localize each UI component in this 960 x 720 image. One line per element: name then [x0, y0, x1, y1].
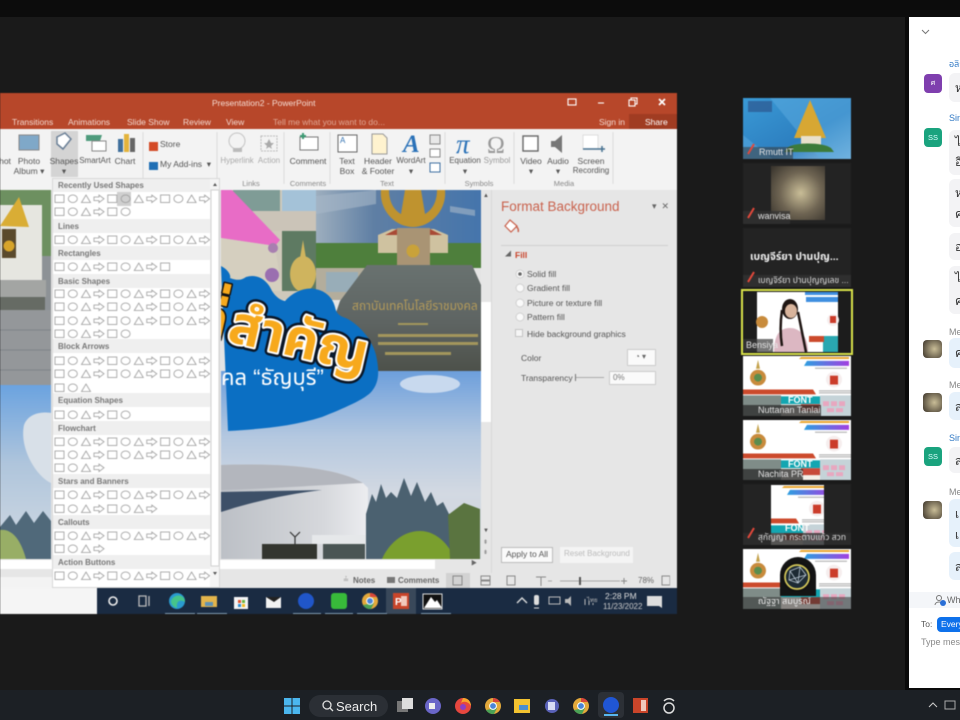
format background pane: Color — [521, 353, 541, 363]
ribbon: Symbols — [465, 179, 493, 188]
status bar: Notes — [353, 576, 375, 585]
chat panel — [905, 17, 960, 690]
icon: ribbon icons: A — [401, 131, 420, 158]
ribbon: Photo — [18, 156, 40, 166]
PowerPoint title bar: Animations — [68, 117, 110, 127]
participant thumbnails column — [740, 97, 854, 610]
slide horizontal scrollbar: ▶ — [471, 561, 477, 567]
participant thumbnails column: Bensiya — [746, 340, 778, 350]
ribbon: ▾ — [409, 166, 413, 176]
participant thumbnails column: wanvisa — [758, 211, 791, 221]
left temple photo — [0, 190, 51, 385]
participant thumbnails column: FONT — [788, 459, 812, 469]
participant thumbnails column: เบญจิร์ยา ปานปุญญเลข ... — [758, 275, 849, 285]
chat contents — [909, 59, 960, 647]
PowerPoint title bar: Share — [645, 117, 668, 127]
ribbon: Box — [340, 166, 354, 176]
ribbon: Action — [258, 156, 280, 165]
icon: ribbon icons: A — [340, 136, 346, 145]
menu scrollbar — [210, 178, 220, 588]
format background pane: Pattern fill — [527, 312, 565, 322]
crown monument photo: สถาบันเทคโนโลยีราชมงคล — [352, 299, 478, 313]
ribbon: Comment — [290, 156, 326, 166]
ribbon: ▾ — [62, 166, 66, 176]
status bar — [0, 573, 677, 588]
format background pane: ◔ ▾ — [635, 352, 646, 361]
blue blob with headline — [220, 266, 379, 432]
ribbon: Hyperlink — [220, 156, 254, 165]
blue blob with headline: สำคัญ — [223, 294, 375, 384]
format background pane: Apply to All — [506, 549, 548, 559]
format background pane: Hide background graphics — [527, 329, 626, 339]
taskbar icons — [109, 593, 662, 614]
ribbon: Screen — [578, 156, 604, 166]
ribbon: Album ▾ — [14, 166, 44, 176]
chat contents: SS — [928, 452, 938, 461]
PowerPoint title bar: Slide Show — [127, 117, 170, 127]
ribbon: Chart — [115, 156, 135, 166]
ribbon: Equation — [449, 156, 481, 165]
ribbon: Links — [242, 179, 260, 188]
participant tile: Rmutt IT — [743, 98, 851, 159]
section header bands — [52, 178, 210, 569]
format background pane: Picture or texture fill — [527, 298, 602, 308]
shapes dropdown menu: Lines — [58, 222, 79, 231]
slide vertical scrollbar: ▼ — [483, 528, 489, 534]
chat contents: เ — [955, 528, 959, 542]
ribbon: WordArt — [396, 156, 426, 165]
shapes dropdown menu — [52, 178, 220, 588]
format background pane — [491, 190, 677, 573]
ribbon: Text — [380, 179, 394, 188]
slide canvas background — [0, 190, 491, 573]
ribbon: SmartArt — [79, 156, 111, 165]
icon: paint bucket — [504, 218, 520, 234]
PowerPoint title bar: Sign in — [599, 117, 625, 127]
participant thumbnails column: Nuttanan Tanlai — [758, 405, 820, 415]
status bar: ≟ — [343, 577, 349, 584]
format background pane: Transparency — [521, 373, 573, 383]
PowerPoint window — [0, 92, 678, 615]
ribbon: Header — [364, 156, 392, 166]
shape icon rows — [53, 192, 211, 583]
ribbon: Comments — [290, 179, 326, 188]
crown monument photo — [316, 190, 481, 371]
participant thumbnails column: FONT — [788, 395, 812, 405]
ribbon — [0, 129, 677, 190]
slide vertical scrollbar: ⇟ — [483, 550, 488, 556]
ribbon: My Add-ins ▾ — [160, 159, 211, 169]
shapes dropdown menu: Equation Shapes — [58, 396, 123, 405]
slide vertical scrollbar: ⇞ — [483, 540, 488, 546]
windows 10 taskbar: ไทย — [587, 598, 598, 604]
PowerPoint title bar: Tell me what you want to do... — [273, 117, 385, 127]
participant tile: Nuttanan — [743, 356, 851, 416]
format background pane: Reset Background — [564, 549, 630, 558]
ribbon: Store — [160, 139, 180, 149]
participant tile: wanvisa — [743, 163, 851, 224]
windows 10 taskbar: 11/23/2022 — [603, 602, 642, 611]
format background pane: Gradient fill — [527, 283, 570, 293]
PowerPoint title bar: Presentation2 - PowerPoint — [212, 98, 315, 108]
slide horizontal scrollbar — [0, 559, 491, 573]
icon: ribbon icons: Ω — [487, 133, 505, 159]
PowerPoint title bar: Transitions — [12, 117, 53, 127]
participant thumbnails column: Nachita PR — [758, 469, 804, 479]
status bar: Comments — [398, 576, 439, 585]
PowerPoint title bar — [0, 93, 677, 129]
slide vertical scrollbar — [481, 190, 491, 573]
shapes dropdown menu: Recently Used Shapes — [58, 181, 144, 190]
ribbon: Symbol — [484, 156, 510, 165]
muted mic markers — [746, 143, 756, 539]
participant thumbnails column: เบญจีร์ยา ปานปุญ... — [750, 251, 839, 263]
chat contents: เ — [955, 507, 959, 521]
ribbon: Audio — [547, 156, 569, 166]
slide vertical scrollbar: ▲ — [483, 193, 489, 199]
windows 11 taskbar — [0, 690, 960, 720]
format background pane: ◢ — [505, 252, 511, 258]
PowerPoint title bar: Review — [183, 117, 211, 127]
windows 10 taskbar — [97, 588, 677, 614]
taskbar icons: P — [395, 597, 402, 608]
left sky and trees — [0, 385, 51, 559]
participant thumbnails column: Rmutt IT — [759, 147, 794, 157]
shapes dropdown menu: Flowchart — [58, 424, 96, 433]
ribbon: ▾ — [556, 166, 560, 176]
status bar: 78% — [638, 576, 654, 585]
ribbon: ▾ — [529, 166, 533, 176]
windows 11 taskbar: Search — [336, 699, 377, 714]
icon: ribbon icons — [19, 129, 605, 172]
format background pane: Format Background — [501, 199, 620, 214]
shapes dropdown menu: Stars and Banners — [58, 477, 129, 486]
participant tile: Bensiya active speaker — [742, 290, 852, 354]
sky and building photo — [221, 371, 481, 559]
participant thumbnails column: ณัฐฐา สมบูรณ์ — [758, 596, 811, 606]
ribbon: Media — [554, 179, 574, 188]
shapes dropdown menu: Basic Shapes — [58, 277, 110, 286]
ribbon: ▾ — [463, 166, 467, 176]
ribbon: Shapes — [50, 156, 78, 166]
shapes dropdown menu: Action Buttons — [58, 558, 115, 567]
blue blob with headline: สำคัญ — [223, 294, 375, 384]
participant tile: Nachita — [743, 420, 851, 480]
windows 10 taskbar: 2:28 PM — [605, 591, 637, 601]
top dark strip — [0, 0, 960, 17]
participant thumbnails column: สุกัญญา กระตาบแก้ว สวท — [758, 532, 846, 542]
PowerPoint title bar: View — [226, 117, 244, 127]
format background pane: Solid fill — [527, 269, 556, 279]
icon row — [284, 697, 955, 716]
chat contents: To: — [921, 619, 932, 629]
chat contents: SS — [928, 133, 938, 142]
blue blob with headline: สำคัญ — [223, 294, 375, 384]
blue blob with headline: ที่ — [187, 278, 237, 352]
upper middle pink photo — [221, 190, 316, 300]
white strip left of windows taskbar — [0, 588, 97, 614]
shapes dropdown menu: Callouts — [58, 518, 90, 527]
ribbon: Video — [520, 156, 542, 166]
shapes dropdown menu: Block Arrows — [58, 342, 109, 351]
slide: photo collage — [0, 189, 482, 560]
shapes dropdown menu: Rectangles — [58, 249, 101, 258]
format background pane: ▾ ✕ — [652, 201, 669, 211]
format background pane: Fill — [515, 250, 527, 260]
blue blob with headline: คล “ธัญบุรี” — [221, 365, 324, 391]
participant tile: avatar overlay — [743, 549, 851, 609]
participant tile: Thai name slide — [743, 484, 851, 546]
participant thumbnails column: FONT — [785, 523, 810, 533]
ribbon: & Footer — [362, 166, 394, 176]
ribbon: Recording — [573, 166, 609, 175]
ribbon: Text — [339, 156, 355, 166]
chat contents: ศ — [931, 80, 935, 87]
icon: ribbon icons: π — [456, 129, 471, 159]
participant tile: Thai name — [743, 228, 851, 287]
format background pane: 0% — [613, 373, 625, 382]
